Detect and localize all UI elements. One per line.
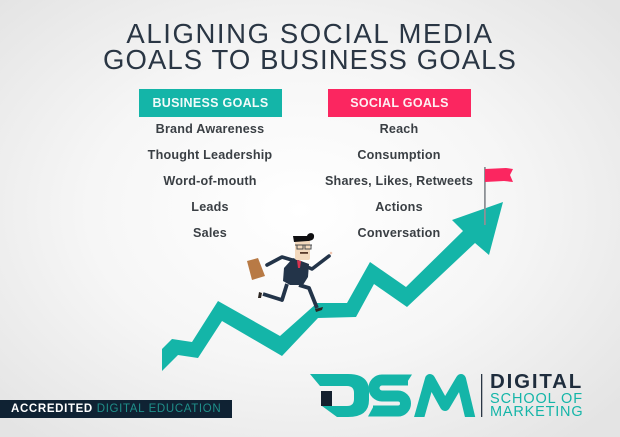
hair: [293, 233, 314, 242]
text: reach: Reach: [380, 122, 418, 136]
title: ALIGNING SOCIAL MEDIA: [126, 18, 494, 49]
torso: [283, 258, 309, 285]
back arm: [267, 257, 292, 265]
heading: social goals: SOCIAL GOALS: [350, 96, 449, 110]
briefcase: [247, 258, 265, 280]
heading: social goals: [328, 89, 471, 117]
text: thought leadership: Thought Leadership: [148, 148, 272, 162]
hand: [330, 252, 332, 254]
text: brand awareness: Brand Awareness: [156, 122, 264, 136]
title: GOALS TO BUSINESS GOALS: [103, 44, 517, 74]
icon: running businessman: [247, 233, 332, 312]
text: consumption: Consumption: [357, 148, 441, 162]
letter M: [417, 379, 472, 425]
legs: [263, 284, 287, 300]
heading: business goals: [139, 89, 282, 117]
text: digital: DIGITAL: [490, 370, 583, 393]
text: conversation: Conversation: [358, 226, 440, 240]
text: word-of-mouth: Word-of-mouth: [163, 174, 257, 188]
moustache: [300, 252, 308, 254]
illustration: growth arrow, flag, runner and logo mark: [162, 167, 513, 417]
title: [103, 18, 517, 74]
letter S: [368, 374, 412, 416]
tie: [297, 260, 301, 268]
text: actions: Actions: [375, 200, 423, 214]
glasses: [295, 245, 312, 249]
D square: [321, 391, 332, 406]
head: [295, 238, 310, 260]
logo mark: DSM: [310, 374, 476, 417]
panel: social goals: [325, 89, 473, 240]
letter D: [310, 374, 369, 417]
text: sales: Sales: [193, 226, 227, 240]
icon: flag: [484, 167, 513, 225]
front arm: [305, 256, 329, 269]
heading: business goals: BUSINESS GOALS: [152, 96, 269, 110]
panel: business goals: [139, 89, 282, 240]
text: marketing: MARKETING: [490, 404, 583, 420]
shoes: [258, 292, 262, 298]
text: school of: SCHOOL OF: [490, 391, 583, 407]
icon: growth arrow: [162, 202, 503, 371]
logo text: [490, 370, 583, 420]
text: leads: Leads: [191, 200, 229, 214]
banner: accredited digital education: ACCREDITED DIGITAL EDUCATION: [11, 403, 221, 415]
logo divider: [481, 374, 482, 417]
text: shares, likes, retweets: Shares, Likes, Retweets: [325, 174, 473, 188]
banner: accredited digital education: [0, 400, 232, 418]
